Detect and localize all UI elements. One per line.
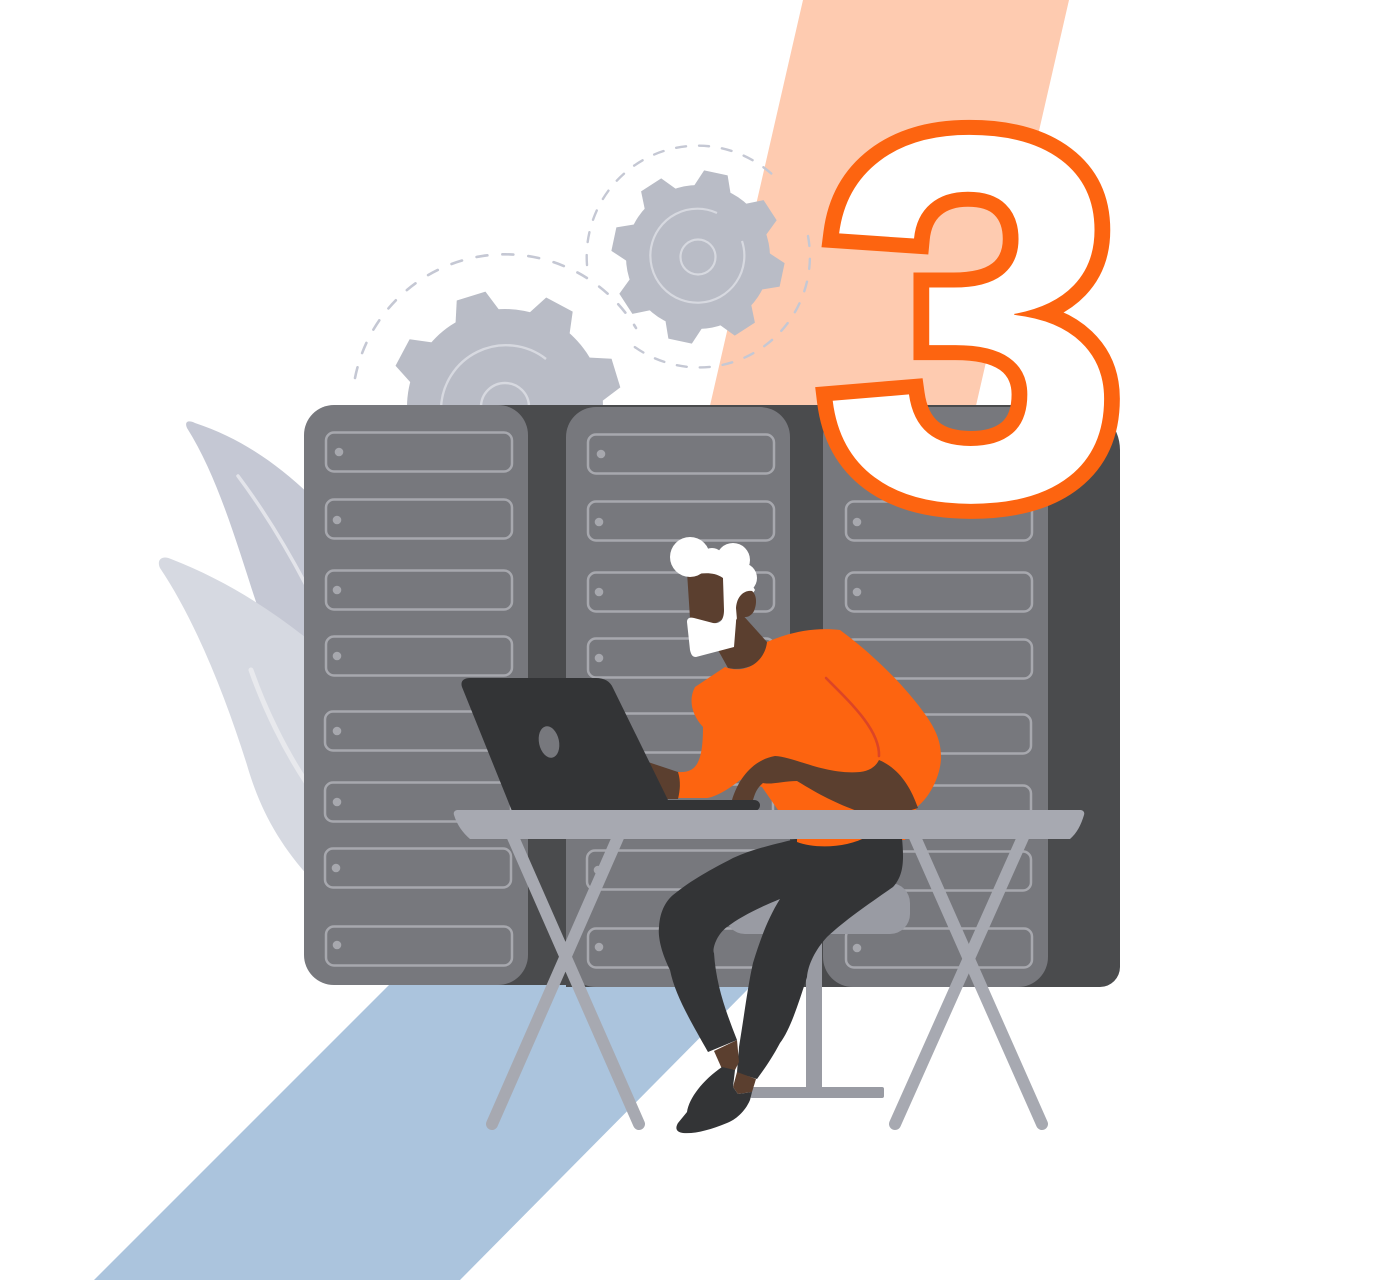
person: sweater hem below desk [797,836,868,846]
blue diagonal band [94,985,752,1280]
person: hand [648,762,680,799]
server rack 3 [823,407,1048,987]
desk legs [492,835,1042,1124]
step number: 3 [820,27,1124,608]
laptop [461,678,760,811]
person: white hair and beard [670,537,757,657]
person: face [687,572,725,624]
person: dark pants [659,838,903,1079]
server rack 2 [566,407,790,987]
person: socks [714,1040,756,1094]
person: sweater crease [826,678,879,756]
server rack 1 [304,405,528,985]
person [648,537,941,1133]
peach diagonal band [709,0,1069,410]
person: brown far arm [732,756,918,812]
icon: large gear [355,254,636,505]
person: shoe [676,1067,752,1133]
person: neck [718,612,770,669]
server rack: back shell [390,405,1120,987]
desk top [454,810,1084,839]
icon: background leaves [159,421,310,878]
stool [725,883,910,1098]
person: ear [736,591,756,620]
person: orange sweater [678,629,941,847]
icon: small gear [587,146,810,367]
